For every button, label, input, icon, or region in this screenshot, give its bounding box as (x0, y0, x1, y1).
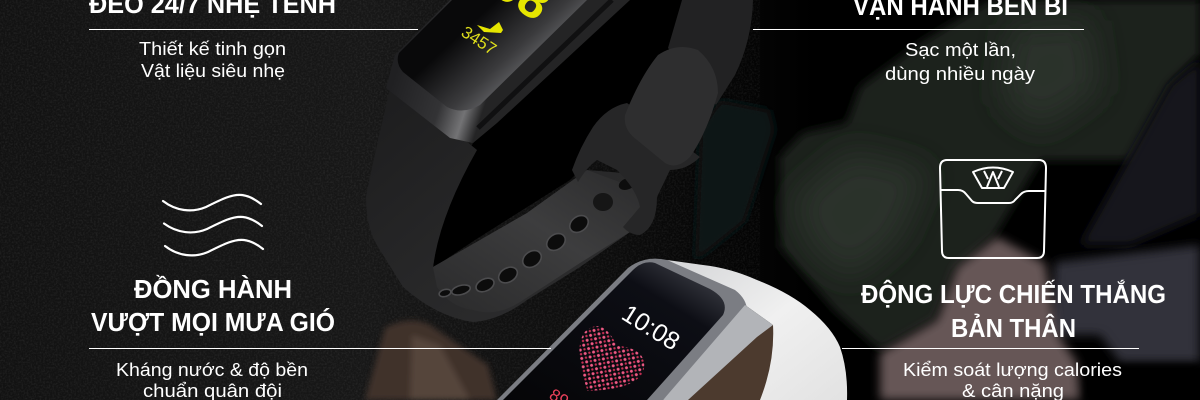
clock reading: 10:08 (617, 299, 685, 356)
description: Sạc một lần, (905, 39, 1016, 60)
upper right dark area (1080, 60, 1200, 245)
buckle hole (617, 176, 637, 192)
black lower right (1085, 365, 1200, 400)
description: dùng nhiều ngày (885, 63, 1036, 84)
divider (89, 348, 551, 349)
white band (667, 260, 847, 400)
black smartwatch band product image (366, 0, 753, 322)
divider (89, 29, 418, 30)
white display screen (503, 262, 725, 400)
panel: water resistance (89, 195, 551, 400)
step count: 3457 (458, 22, 500, 59)
background: dark shoe near centre right (695, 100, 775, 262)
strap surface (433, 170, 650, 312)
display screen (398, 0, 587, 111)
icon: weighing scale (940, 160, 1046, 258)
heading: VƯỢT MỌI MƯA GIÓ (91, 307, 335, 337)
silver bezel (497, 259, 747, 400)
panel: weight tracking (842, 160, 1166, 400)
upper right band (668, 0, 753, 105)
band inner shadow (433, 0, 685, 268)
shoe icon (477, 22, 503, 33)
strap holes (438, 212, 591, 298)
wrist through band (680, 320, 775, 400)
silver edge (663, 305, 773, 400)
icon: waves (163, 195, 263, 255)
band tab (625, 47, 718, 165)
description: Kiểm soát lượng calories (903, 359, 1122, 380)
description: Vật liệu siêu nhẹ (141, 60, 285, 81)
divider (753, 29, 1084, 30)
band seam groove (478, 0, 612, 128)
panel: battery (753, 0, 1084, 84)
jeans (1050, 245, 1200, 362)
background: sweater, hand and jeans (780, 0, 1200, 400)
description: Kháng nước & độ bền (116, 359, 308, 380)
panel: wear all day (89, 0, 418, 81)
sweater fold highlights (790, 20, 1100, 280)
dotted heart (558, 321, 651, 400)
buckle loop (572, 103, 700, 235)
heading: ĐỒNG HÀNH (134, 274, 292, 304)
heading: BẢN THÂN (951, 313, 1076, 343)
display body (386, 0, 630, 143)
white smartwatch product image (497, 259, 847, 400)
background: skin at bottom centre (365, 321, 497, 400)
description: Thiết kế tinh gọn (139, 38, 286, 59)
divider (842, 348, 1139, 349)
hand (880, 237, 1080, 400)
left band and lower strap (366, 80, 650, 322)
sweater mass (780, 0, 1200, 350)
strap pin (593, 193, 613, 211)
heading: ĐỘNG LỰC CHIẾN THẮNG (861, 279, 1166, 309)
